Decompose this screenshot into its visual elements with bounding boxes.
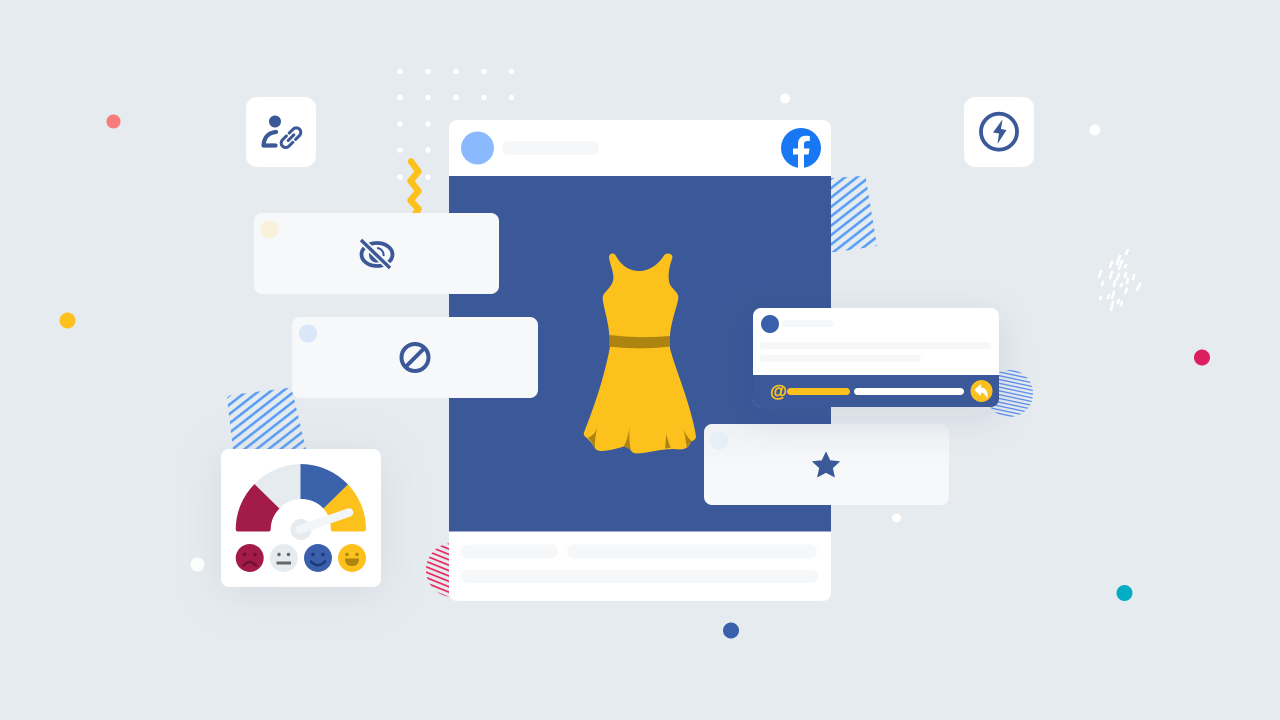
reply bar bbox=[753, 375, 999, 407]
gauge segment: very positive bbox=[324, 484, 366, 532]
gauge needle bbox=[290, 512, 349, 540]
hatched block left bbox=[227, 388, 306, 449]
gauge segment: positive bbox=[300, 464, 348, 508]
yellow zigzag bbox=[410, 162, 418, 216]
facebook logo bbox=[781, 128, 821, 168]
face: happy bbox=[304, 544, 332, 572]
card: hidden eye bbox=[254, 213, 499, 294]
post name bar bbox=[502, 141, 599, 155]
card: star rating bbox=[704, 424, 949, 505]
commenter avatar bbox=[761, 315, 779, 333]
icon: crossed-out eye bbox=[361, 240, 392, 268]
link icon bbox=[279, 126, 303, 149]
icon: no entry bbox=[402, 344, 428, 371]
person icon bbox=[269, 116, 281, 128]
mention bar bbox=[787, 388, 850, 395]
dress belt bbox=[609, 335, 670, 348]
comment text bars bbox=[760, 320, 991, 362]
post footer bars bbox=[461, 544, 818, 583]
reply comment card bbox=[753, 308, 999, 407]
face: neutral bbox=[270, 544, 298, 572]
gauge segment: neutral bbox=[254, 464, 300, 508]
at sign: @ bbox=[770, 381, 787, 401]
face: sad bbox=[236, 544, 264, 572]
hatched circle blue bbox=[986, 370, 1033, 417]
reply text bar bbox=[854, 388, 964, 395]
dress folds bbox=[588, 422, 692, 451]
icon tile: person with link bbox=[246, 97, 316, 167]
dot grid bbox=[397, 69, 514, 180]
post image area bbox=[449, 176, 831, 532]
hatched circle red bbox=[426, 543, 480, 597]
white rain marks bbox=[1099, 250, 1140, 310]
main facebook post card bbox=[449, 120, 831, 601]
card: blocked bbox=[292, 317, 538, 398]
face: delighted bbox=[338, 544, 366, 572]
post avatar bbox=[461, 132, 494, 164]
sentiment gauge card bbox=[221, 449, 381, 587]
dress bbox=[584, 253, 696, 453]
icon: reply button bbox=[970, 380, 992, 402]
decorative scattered dots bbox=[60, 94, 1210, 638]
icon: star bbox=[812, 452, 840, 477]
gauge segment: negative bbox=[236, 484, 280, 532]
hatched block right bbox=[831, 176, 877, 252]
icon tile: lightning bolt bbox=[964, 97, 1034, 167]
